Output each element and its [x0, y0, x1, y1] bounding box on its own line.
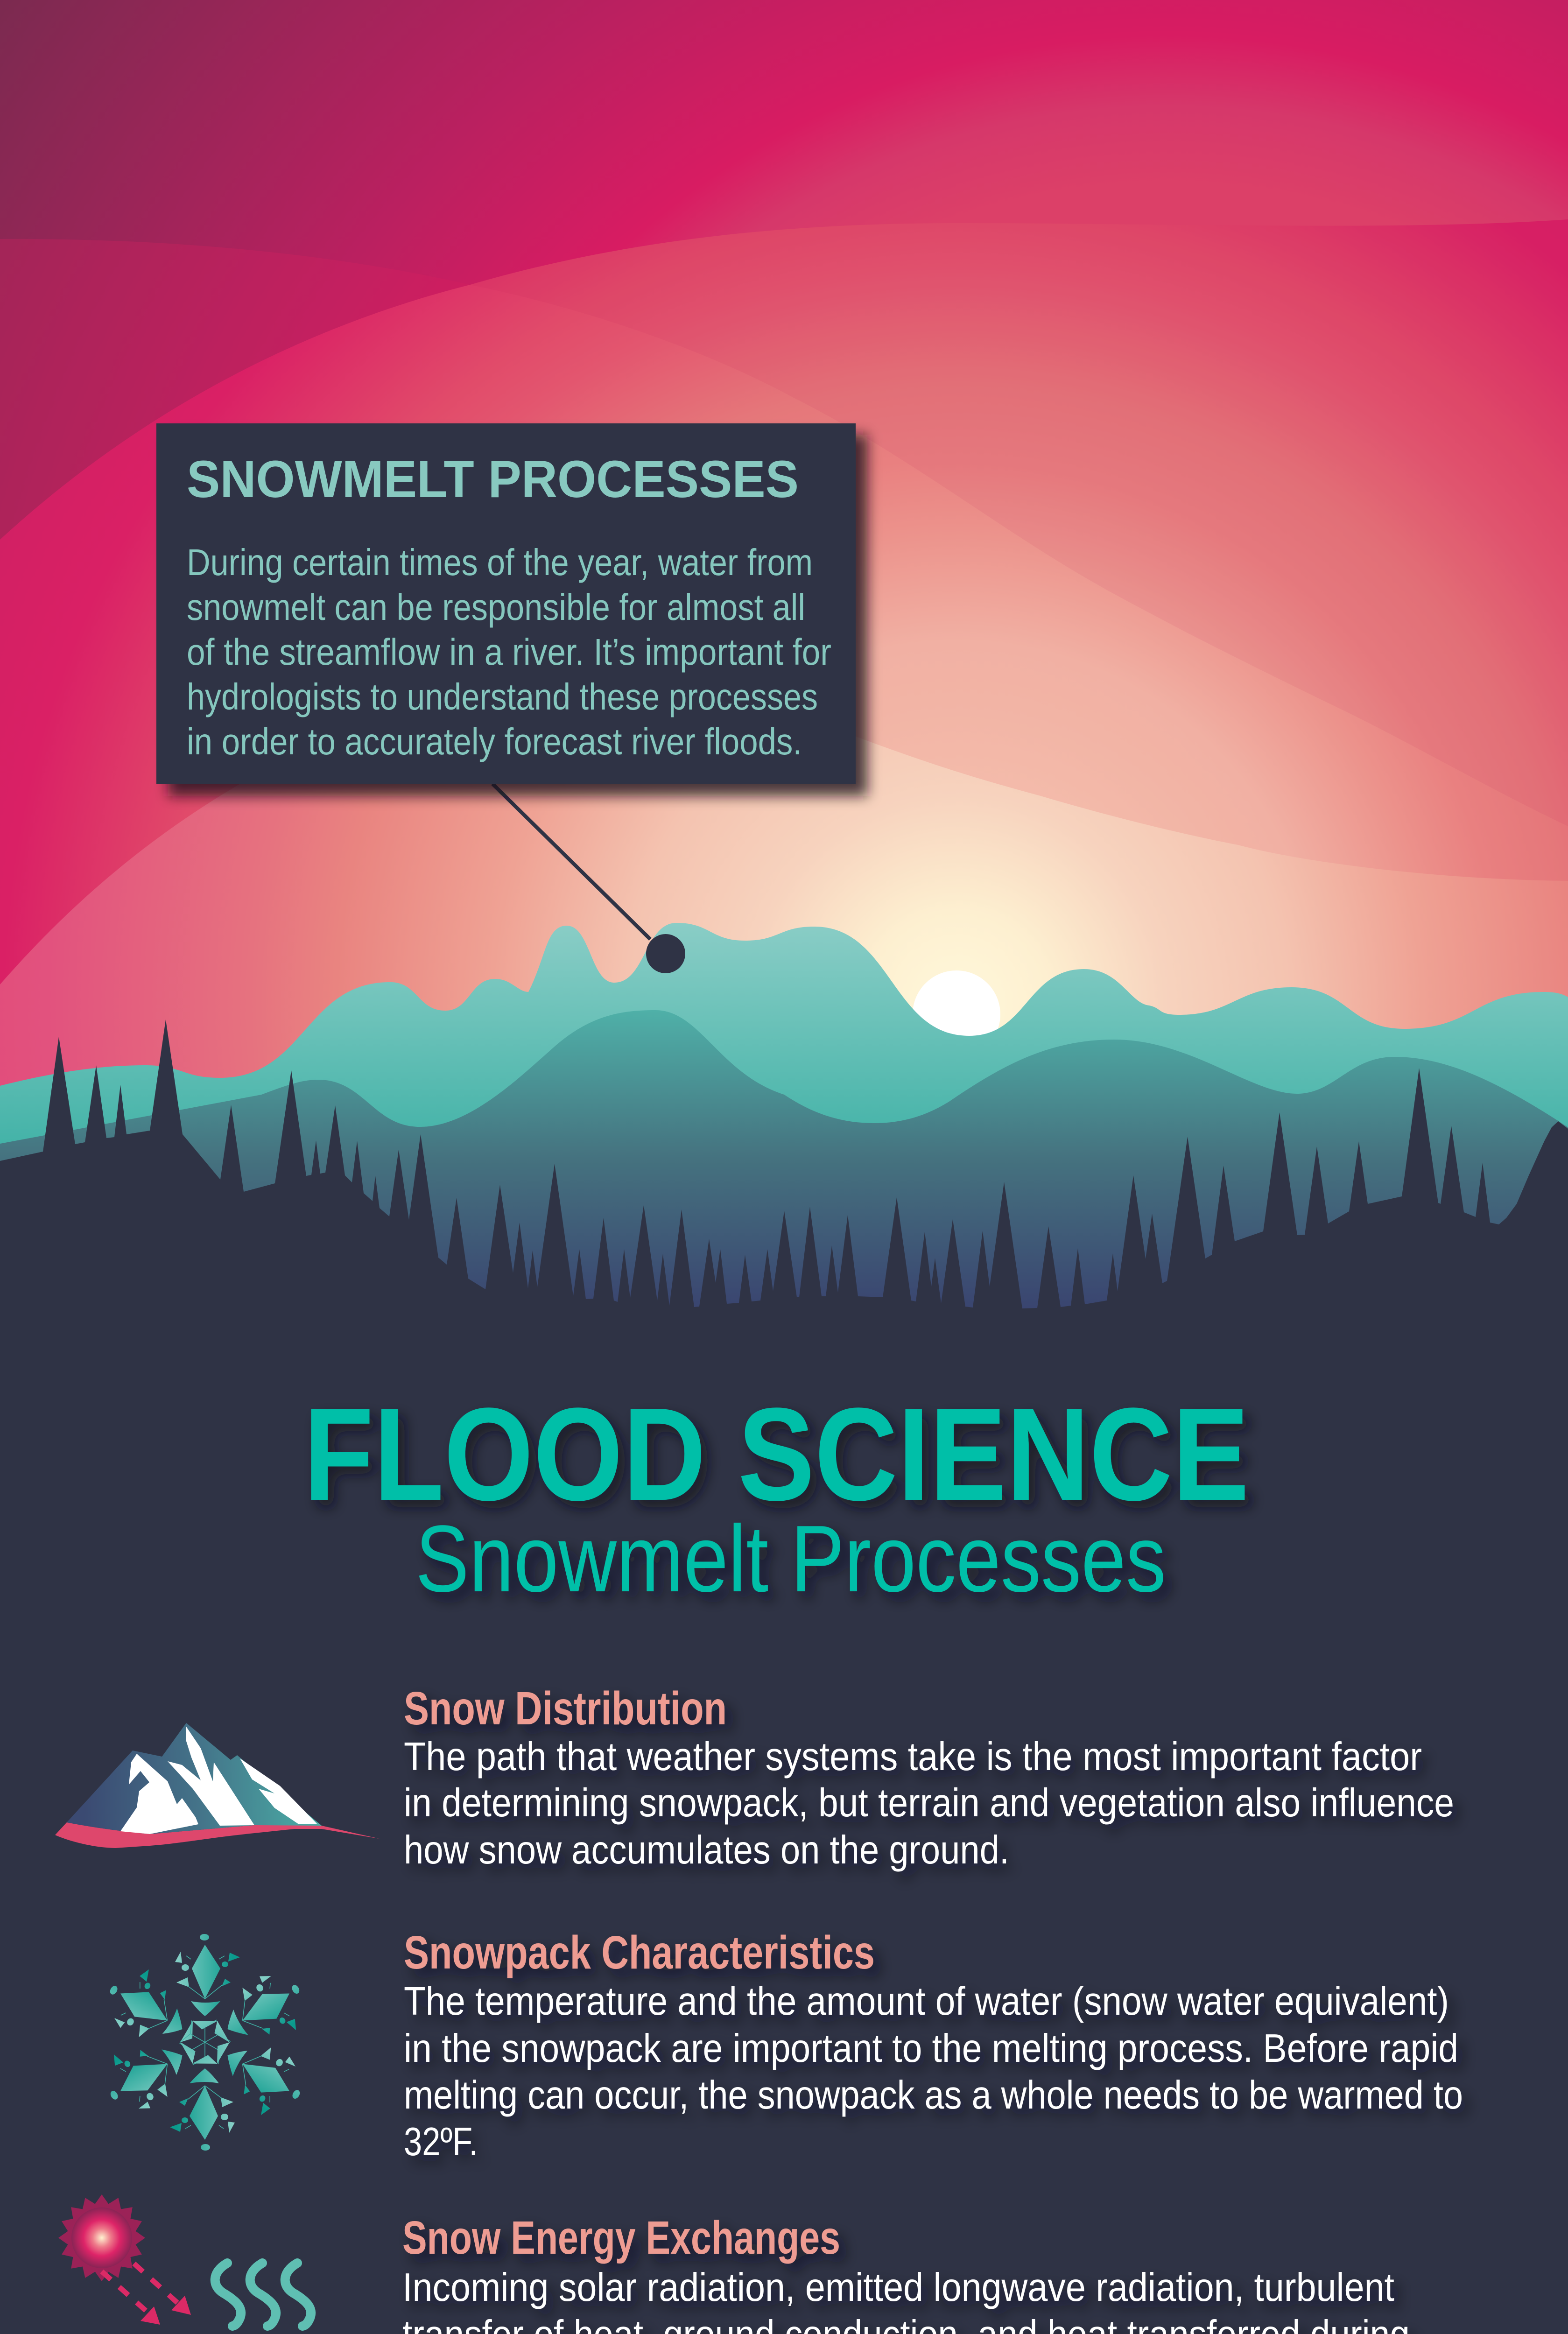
heading and text: snowpack characteristics: melting can occur, the snowpack as a whole needs to be warmed to — [404, 2073, 1463, 2117]
heading and text: snow energy exchanges: Incoming solar radiation, emitted longwave radiation, turbulent — [402, 2265, 1394, 2310]
callout body text: snowmelt can be responsible for almost all — [187, 586, 805, 628]
title: FLOOD SCIENCE — [303, 1380, 1249, 1528]
callout body text: of the streamflow in a river. It’s important for — [187, 631, 831, 673]
heading and text: snowpack characteristics: 32ºF. — [404, 2120, 478, 2164]
sky background — [0, 0, 1568, 1354]
title — [303, 1380, 1249, 1612]
icon: sun, radiation arrows, heat waves and melting snow — [58, 2194, 321, 2334]
forest silhouette — [0, 1019, 1568, 1354]
heat waves — [215, 2263, 311, 2326]
callout heading: SNOWMELT PROCESSES — [187, 450, 799, 508]
heading and text: snow energy exchanges: Snow Energy Exchanges — [402, 2212, 840, 2264]
heading and text: snow distribution — [404, 1682, 1454, 1872]
callout body text: in order to accurately forecast river floods. — [187, 721, 802, 762]
heading and text: snowpack characteristics: in the snowpack are important to the melting process. Before rapid — [404, 2026, 1458, 2071]
sun rays — [58, 2194, 145, 2281]
panel: snowmelt processes callout — [156, 423, 856, 784]
far mountain ridge — [0, 923, 1568, 1330]
subtitle: Snowmelt Processes — [415, 1506, 1166, 1612]
heading and text: snow distribution: The path that weather systems take is the most important factor — [404, 1735, 1422, 1779]
callout body text — [187, 541, 831, 762]
heading and text: snowpack characteristics: Snowpack Characteristics — [404, 1926, 875, 1979]
sun — [913, 970, 1000, 1058]
icon: snowflake — [94, 1934, 316, 2151]
sun disc — [71, 2207, 132, 2268]
icon: snowy mountain — [55, 1723, 380, 1848]
radiation arrows — [102, 2264, 191, 2325]
heading and text: snow distribution: in determining snowpack, but terrain and vegetation also influence — [404, 1781, 1454, 1825]
heading and text: snow energy exchanges — [402, 2212, 1473, 2334]
callout body text: hydrologists to understand these processes — [187, 676, 818, 717]
callout pointer line and dot — [492, 784, 685, 973]
heading and text: snowpack characteristics — [404, 1926, 1463, 2164]
heading and text: snowpack characteristics: The temperature and the amount of water (snow water equivalent) — [404, 1979, 1449, 2024]
middle mountain ridge — [0, 1010, 1568, 1330]
heading and text: snow distribution: how snow accumulates on the ground. — [404, 1828, 1009, 1872]
callout body text: During certain times of the year, water from — [187, 541, 813, 583]
heading and text: snow distribution: Snow Distribution — [404, 1682, 727, 1735]
callout box shadow — [168, 435, 867, 796]
